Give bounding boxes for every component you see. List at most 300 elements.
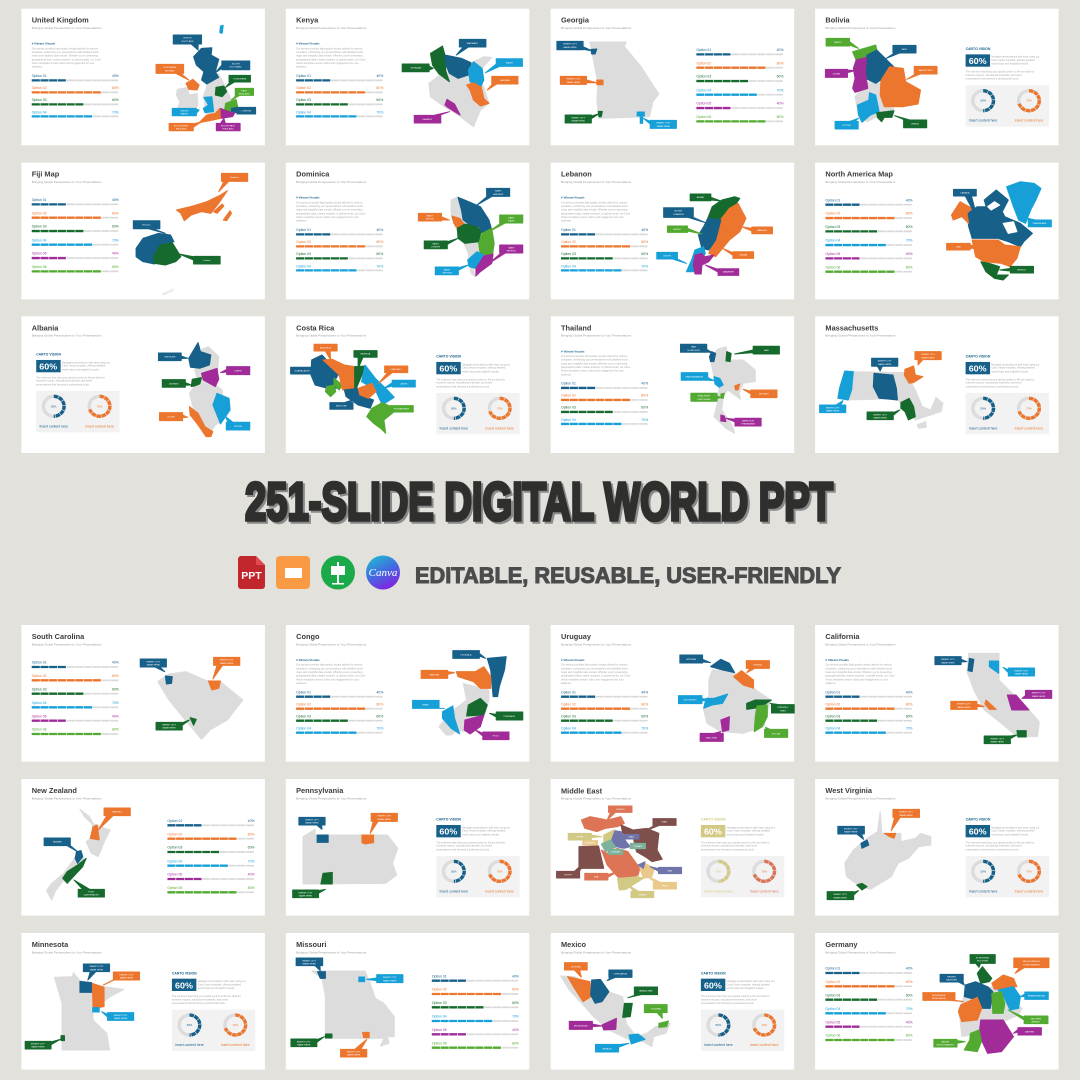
bar chart: Option 01 xyxy=(32,661,47,665)
panel: Carto Vision: Carto Vision template, offering detailed xyxy=(991,59,1035,62)
callout: south city: NAME HERE xyxy=(299,894,313,897)
text block: vibrant visuals: # Vibrant Visuals xyxy=(296,658,320,662)
bar chart: 40% xyxy=(512,974,519,978)
panel: Carto Vision xyxy=(701,971,784,1051)
callout: Beni: BENI xyxy=(902,49,907,51)
bar chart: Option 02 xyxy=(296,240,311,244)
bar chart: 80% xyxy=(376,702,383,706)
callout: southwest city: INSERT CITY xyxy=(31,1044,45,1046)
bar chart: Option 02 xyxy=(825,702,840,706)
bar chart: Option 04 xyxy=(296,110,311,114)
callout: west city: NAME HERE xyxy=(844,831,858,834)
callout: Pando: PANDO xyxy=(834,41,842,44)
bar chart: 40% xyxy=(906,690,913,694)
callout: central city xyxy=(102,1012,134,1020)
callout: south city: INSERT CITY xyxy=(873,414,888,416)
text block: vibrant visuals: audience. xyxy=(296,66,307,69)
heading: Bringing Global Perspectives to Your Presentations xyxy=(561,950,632,954)
callout: Waikato: WAIKATO xyxy=(112,811,122,814)
callout: Central: Central xyxy=(203,259,211,262)
bar chart: 80% xyxy=(112,265,119,269)
callout: Iraq: IRAQ xyxy=(629,836,634,839)
panel: Carto Vision: 60% xyxy=(439,827,457,837)
panel: Carto Vision: 70% xyxy=(761,1023,768,1027)
callout: Saint George: GEORGE xyxy=(442,272,452,274)
text block: vibrant visuals: maps and insightful data visuals. Whether you're presenting xyxy=(561,209,628,212)
icon: Canva xyxy=(366,556,400,590)
panel: Carto Vision: The schemes that bring your global content to life are ideal for xyxy=(172,995,241,998)
panel: Carto Vision: presentations that demand a professional touch. xyxy=(966,848,1019,851)
callout: northeast city: NAME HERE xyxy=(378,818,391,821)
slide: West Virginia xyxy=(815,779,1059,916)
callout: central coast city: INSERT CITY xyxy=(957,704,971,706)
bar chart xyxy=(296,228,383,270)
heading xyxy=(32,786,102,800)
bar chart: 40% xyxy=(248,873,255,877)
panel: Carto Vision: The schemes that bring your global content to life are ideal for xyxy=(966,378,1035,381)
callout: Durres: DURRES xyxy=(169,383,179,385)
bar chart: Option 01 xyxy=(561,382,576,386)
callout: south city: NAME HERE xyxy=(163,727,176,730)
panel: Carto Vision: The schemes that bring your global content to life are ideal for xyxy=(966,841,1035,844)
heading xyxy=(561,632,632,646)
callout: Sachsen-Anhalt: SACHSEN xyxy=(1030,1017,1042,1020)
bar chart xyxy=(167,819,255,892)
callout: Saint George xyxy=(435,265,468,275)
bar chart: 40% xyxy=(906,252,913,256)
callout: top city: INSERT CITY xyxy=(563,44,577,46)
bar chart: 80% xyxy=(112,674,119,678)
heading: Bringing Global Perspectives to Your Presentations xyxy=(561,642,632,646)
bar chart: 60% xyxy=(641,406,648,410)
panel: Carto Vision: presentations that demand a professional touch. xyxy=(36,383,90,386)
panel: Carto Vision: Insert content here xyxy=(969,119,998,123)
panel: Carto Vision: business reports, educational materials, and travel xyxy=(36,380,93,383)
callout: south city: INSERT CITY xyxy=(162,725,177,727)
heading xyxy=(561,16,632,30)
heading xyxy=(296,323,367,338)
callout: Saint Joseph: SAINT xyxy=(432,242,440,245)
text block: vibrant visuals: templates, enhancing your presentations with detailed world xyxy=(32,51,99,54)
callout: South: SOUTH xyxy=(663,255,671,257)
heading xyxy=(32,323,102,338)
panel: Carto Vision: CARTO VISION xyxy=(701,971,726,975)
callout: Mae Hong Son xyxy=(681,344,712,353)
bar chart: Option 04 xyxy=(32,701,47,705)
callout: northeast city xyxy=(370,813,397,833)
callout: Tasman: TASMAN xyxy=(53,841,62,844)
bar chart: 80% xyxy=(112,86,119,90)
heading: Mexico xyxy=(561,940,587,949)
callout: Turkey: TURKEY xyxy=(616,809,625,811)
bar chart: Option 03 xyxy=(825,225,840,229)
text block: vibrant visuals: maps and insightful data visuals. Whether you're presenting xyxy=(296,209,363,212)
bar chart: 40% xyxy=(777,102,784,106)
slide: Uruguay xyxy=(551,625,794,762)
slide: Pennsylvania xyxy=(286,779,529,916)
callout: Saint Andrew: SAINT xyxy=(495,190,502,193)
callout: Brandenburg: BRANDENBURG xyxy=(1028,995,1045,998)
map: California xyxy=(935,653,1052,744)
bar chart: Option 03 xyxy=(32,687,47,691)
callout: coastal city: INSERT CITY xyxy=(656,123,671,125)
callout: Likouala: LIKOUALA xyxy=(460,653,472,656)
heading: Bringing Global Perspectives to Your Presentations xyxy=(32,180,102,184)
map: Missouri xyxy=(291,958,403,1057)
bar chart: Option 02 xyxy=(296,702,311,706)
bar chart: Option 01 xyxy=(296,74,311,78)
callout: south city xyxy=(827,891,858,900)
callout: northwest city: NAME HERE xyxy=(147,664,160,667)
bar chart: 60% xyxy=(641,252,648,256)
callout: south city: INSERT CITY xyxy=(347,1052,361,1054)
bar chart: 40% xyxy=(641,690,648,694)
bar chart: Option 02 xyxy=(32,211,47,215)
heading: Bringing Global Perspectives to Your Presentations xyxy=(296,334,367,338)
heading: Bringing Global Perspectives to Your Presentations xyxy=(825,26,896,30)
callout: Mount Lebanon: LEBANON xyxy=(673,213,684,216)
callout: Niedersachsen: NIEDER xyxy=(947,977,956,979)
callout: north city: NAME HERE xyxy=(220,662,234,665)
panel: Carto Vision: world maps and insightful visuals. xyxy=(991,833,1029,836)
bar chart: Option 01 xyxy=(561,690,576,694)
callout: Beirut: BEIRUT xyxy=(673,229,682,231)
bar chart: 70% xyxy=(112,238,119,242)
text block: vibrant visuals: Our service provides high-quality visuals tailored for various xyxy=(561,355,628,358)
heading: Bringing Global Perspectives to Your Presentations xyxy=(825,334,896,338)
bar chart: 40% xyxy=(906,967,913,971)
panel: Carto Vision: presentations that demand a professional touch. xyxy=(701,848,755,851)
callout: northwest city xyxy=(296,958,323,971)
panel: Carto Vision xyxy=(966,47,1049,127)
panel: Carto Vision: 50% xyxy=(980,869,987,873)
text block: vibrant visuals: Our service provides high-quality visuals tailored for various xyxy=(32,47,99,50)
map: Kenya xyxy=(402,39,522,127)
callout: Rocha: ROCHA xyxy=(772,732,780,735)
bar chart: Option 06 xyxy=(32,265,47,269)
panel: Carto Vision: 50% xyxy=(51,404,57,408)
text block: vibrant visuals: audience. xyxy=(296,682,307,685)
callout: south city xyxy=(984,735,1017,744)
panel: Carto Vision: Navigate presentations with ease using our xyxy=(727,980,775,983)
panel: Carto Vision: 50% xyxy=(980,99,987,103)
text block: vibrant visuals: Our service provides high-quality visuals tailored for various xyxy=(296,664,363,667)
bar chart: 80% xyxy=(906,1034,913,1038)
bar chart: Option 06 xyxy=(167,886,182,890)
bar chart: Option 01 xyxy=(296,690,311,694)
callout: Saint Andrew: ANDREW xyxy=(493,193,504,196)
panel: Carto Vision: presentations that demand a professional touch. xyxy=(966,385,1019,388)
callout: Cartago: CARTAGO xyxy=(391,368,402,371)
callout: Akkar: AKKAR xyxy=(697,196,705,199)
heading: Lebanon xyxy=(561,170,592,179)
callout: Oaxaca: OAXACA xyxy=(602,1047,612,1050)
callout: Marsabit: MARSABIT xyxy=(467,42,479,45)
panel: Carto Vision: world maps and insightful visuals. xyxy=(991,370,1029,373)
panel: Carto Vision: business reports, educational materials, and travel xyxy=(436,382,493,385)
bar chart: 40% xyxy=(376,690,383,694)
text block: vibrant visuals: templates, enhancing your presentations with detailed world xyxy=(296,205,363,208)
panel: Carto Vision: Insert content here xyxy=(485,426,514,430)
callout: north city xyxy=(83,964,110,980)
heading: Bringing Global Perspectives to Your Presentations xyxy=(296,180,367,184)
text block: vibrant visuals: Our service provides high-quality visuals tailored for various xyxy=(561,201,628,204)
callout: Saint George: SAINT xyxy=(444,268,451,271)
bar chart: Option 01 xyxy=(32,198,47,202)
slide: Germany xyxy=(815,933,1059,1070)
text block: vibrant visuals: Vision templates ensure clarity and engagement for your xyxy=(32,62,95,65)
bar chart xyxy=(32,198,119,271)
bar chart: Option 04 xyxy=(32,110,47,114)
callout: Yemen: YEMEN xyxy=(638,894,647,896)
panel: Carto Vision: world maps and insightful visuals. xyxy=(62,368,100,371)
callout: Kanchanaburi: KANCHANABURI xyxy=(685,375,704,378)
bar chart: 60% xyxy=(112,225,119,229)
bar chart: 60% xyxy=(512,1001,519,1005)
heading: North America Map xyxy=(825,170,893,179)
panel: Carto Vision: presentations that demand a professional touch. xyxy=(966,78,1019,81)
heading: Bolivia xyxy=(825,16,851,25)
heading: Middle East xyxy=(561,786,603,795)
panel: Carto Vision xyxy=(701,818,784,897)
callout: Michoacan: MICHOACAN xyxy=(574,1024,588,1027)
callout: Mecklenburg xyxy=(1014,958,1049,973)
bar chart xyxy=(561,690,648,733)
panel: Carto Vision: The schemes that bring your global content to life are ideal for xyxy=(436,841,505,844)
panel: Carto Vision: business reports, educational materials, and travel xyxy=(966,845,1022,848)
callout: Saint Patrick: PATRICK xyxy=(507,250,517,253)
heading xyxy=(561,323,632,338)
panel: Carto Vision: 70% xyxy=(1026,406,1032,410)
callout: Iran: IRAN xyxy=(662,821,667,824)
bar chart xyxy=(432,974,519,1048)
bar chart: 40% xyxy=(641,228,648,232)
callout: Vlore: VLORE xyxy=(167,417,175,419)
bar chart: 60% xyxy=(112,687,119,691)
callout: Saint Joseph: JOSEPH xyxy=(431,246,440,248)
heading xyxy=(561,940,632,954)
bar chart: Option 05 xyxy=(696,102,711,106)
callout: South West England: ENGLAND xyxy=(176,127,187,130)
callout: Saint Patrick xyxy=(489,245,523,263)
callout: north city xyxy=(213,657,240,679)
bar chart: Option 05 xyxy=(32,252,47,256)
heading: Bringing Global Perspectives to Your Presentations xyxy=(825,796,896,800)
bar chart: Option 04 xyxy=(561,264,576,268)
slide: Mexico xyxy=(551,933,794,1070)
heading: Bringing Global Perspectives to Your Presentations xyxy=(561,797,632,801)
bar chart: Option 01 xyxy=(825,198,840,202)
panel: Carto Vision: presentations that demand a professional touch. xyxy=(701,1002,755,1005)
heading: Congo xyxy=(296,632,320,641)
map: New Zealand xyxy=(44,808,130,900)
panel: Carto Vision: Insert content here xyxy=(85,424,114,428)
panel: Carto Vision: 70% xyxy=(1026,869,1032,873)
text block: vibrant visuals xyxy=(296,42,366,69)
bar chart: Option 04 xyxy=(825,239,840,243)
panel: Carto Vision xyxy=(966,355,1049,434)
text block: vibrant visuals: templates, enhancing your presentations with detailed world xyxy=(561,205,628,208)
callout: Rio Negro: RIO NEGRO xyxy=(684,700,697,702)
heading: Kenya xyxy=(296,16,319,25)
callout: coastal city: NAME HERE xyxy=(657,125,670,128)
callout: Schleswig-Holstein xyxy=(970,955,995,967)
icon: Canva: Canva xyxy=(369,567,398,579)
heading xyxy=(32,16,102,30)
callout: Lebanon: LEBANON xyxy=(585,842,596,845)
panel: Carto Vision: world maps and insightful visuals. xyxy=(198,987,235,990)
text block: vibrant visuals: maps and insightful data visuals. Whether you're presenting xyxy=(296,671,363,674)
heading xyxy=(825,786,896,800)
panel: Carto Vision: business reports, educational materials, and travel xyxy=(966,382,1022,385)
bar chart: 70% xyxy=(376,727,383,731)
text block: vibrant visuals: geographical data, market analysis, or global trends, our Carto xyxy=(296,675,366,678)
panel: Carto Vision: 60% xyxy=(39,362,57,372)
callout: middle city xyxy=(560,76,597,84)
slide: Kenya xyxy=(286,9,529,145)
bar chart: 70% xyxy=(906,239,913,243)
slide: Thailand xyxy=(551,316,794,453)
callout: northeast city xyxy=(1003,667,1034,676)
callout: south city: INSERT CITY xyxy=(299,892,313,894)
panel: Carto Vision: 50% xyxy=(187,1023,193,1027)
callout: Nordrhein-Westfalen: NORDRHEIN xyxy=(932,995,946,997)
callout: Tarija: TARIJA xyxy=(911,123,919,126)
callout: west city: INSERT CITY xyxy=(826,407,840,409)
text block: vibrant visuals: # Vibrant Visuals xyxy=(561,349,585,353)
callout: central city: NAME HERE xyxy=(878,363,892,366)
heading: Bringing Global Perspectives to Your Presentations xyxy=(296,642,367,646)
bar chart: 70% xyxy=(641,418,648,422)
callout: Wales: WALES xyxy=(180,112,189,115)
text block: vibrant visuals: Vision templates ensure clarity and engagement for your xyxy=(296,216,359,219)
callout: southwest city xyxy=(291,1037,324,1047)
callout: north coast city: NAME HERE xyxy=(941,661,955,664)
bar chart: Option 02 xyxy=(32,86,47,90)
callout: UAE: UAE xyxy=(668,869,673,872)
callout: northeast city: INSERT CITY xyxy=(1015,670,1029,672)
callout: Wales: SOUTH xyxy=(180,110,189,112)
bar chart: 80% xyxy=(112,211,119,215)
bar chart: Option 04 xyxy=(296,264,311,268)
panel: Carto Vision: 50% xyxy=(451,406,457,410)
panel: Carto Vision: The schemes that bring your global content to life are ideal for xyxy=(701,841,770,844)
icon: PPT file xyxy=(238,556,265,589)
bar chart: Option 04 xyxy=(32,238,47,242)
heading xyxy=(296,632,367,646)
panel: Carto Vision xyxy=(172,971,255,1051)
panel: Carto Vision: 50% xyxy=(980,406,987,410)
panel: Carto Vision: CARTO VISION xyxy=(701,818,726,822)
callout: south city xyxy=(293,889,325,898)
panel: Carto Vision: 60% xyxy=(704,827,722,837)
slide: Massachusetts xyxy=(815,316,1059,453)
bar chart: 40% xyxy=(777,48,784,52)
panel: Carto Vision: Insert content here xyxy=(440,426,468,430)
bar chart: Option 01 xyxy=(296,228,311,232)
bar chart: 80% xyxy=(777,61,784,65)
callout: Kajiado: KAJIADO xyxy=(423,118,432,121)
heading: Bringing Global Perspectives to Your Presentations xyxy=(561,180,632,184)
panel: Carto Vision: Navigate presentations with ease using our xyxy=(462,826,510,829)
panel: Carto Vision: 50% xyxy=(716,1023,722,1027)
bar chart: 70% xyxy=(112,110,119,114)
callout: northwest city: NAME HERE xyxy=(305,822,319,825)
callout: Mount Lebanon: MOUNT xyxy=(674,211,683,213)
bar chart: 70% xyxy=(777,88,784,92)
callout: northeast city: NAME HERE xyxy=(921,356,935,359)
callout: north city: INSERT CITY xyxy=(90,966,104,968)
text block: vibrant visuals: audience. xyxy=(561,682,572,685)
heading xyxy=(296,940,367,954)
callout: central city xyxy=(872,358,898,371)
text block: vibrant visuals: maps and insightful data visuals. Whether you're presenting xyxy=(825,671,892,674)
callout: Sangha: SANGHA xyxy=(430,673,439,676)
bar chart: Option 02 xyxy=(696,61,711,65)
bar chart: Option 02 xyxy=(825,212,840,216)
callout: south city: INSERT CITY xyxy=(990,738,1005,740)
bar chart: Option 06 xyxy=(432,1041,447,1045)
bar chart: Option 02 xyxy=(32,674,47,678)
callout: central coast city xyxy=(951,701,984,709)
callout: East England xyxy=(231,88,254,100)
slide: Lebanon xyxy=(551,163,794,299)
callout: Yorkshire: YORKSHIRE xyxy=(233,78,247,80)
bar chart: Option 02 xyxy=(825,980,840,984)
callout: northwest city xyxy=(299,817,325,829)
slide: Georgia xyxy=(551,9,794,145)
bar chart: 40% xyxy=(112,661,119,665)
panel: Carto Vision: 50% xyxy=(716,869,722,873)
panel: Carto Vision: Insert content here xyxy=(704,889,733,893)
callout: inland city: INSERT CITY xyxy=(1032,693,1046,695)
callout: Heredia: HEREDIA xyxy=(360,353,371,356)
headline xyxy=(245,472,835,534)
icon: Keynote xyxy=(321,556,355,590)
panel: Carto Vision: world maps and insightful visuals. xyxy=(462,833,500,836)
callout: west city xyxy=(838,826,864,839)
bar chart: Option 05 xyxy=(167,873,182,877)
callout: Egypt: EGYPT xyxy=(564,874,573,876)
callout: central city: INSERT CITY xyxy=(878,361,892,363)
panel: Carto Vision: Insert content here xyxy=(175,1043,204,1047)
callout: Mexico: MEXICO xyxy=(1017,269,1026,271)
panel: Carto Vision: business reports, educational materials, and travel xyxy=(172,998,228,1001)
slide: Costa Rica xyxy=(286,316,529,453)
bar chart: Option 04 xyxy=(825,727,840,731)
heading: Bringing Global Perspectives to Your Presentations xyxy=(32,334,102,338)
panel: Carto Vision: 70% xyxy=(497,869,503,873)
callout: San Jose: SAN JOSE xyxy=(706,736,718,739)
bar chart: Option 04 xyxy=(296,727,311,731)
callout: Nan: NAN xyxy=(764,349,769,352)
callout: Saint Joseph xyxy=(424,238,458,249)
text block: vibrant visuals: Our service provides high-quality visuals tailored for various xyxy=(561,664,628,667)
map: Fiji xyxy=(133,173,248,295)
map: Minnesota xyxy=(25,964,140,1050)
heading: Massachusetts xyxy=(825,323,878,332)
panel: Carto Vision: Carto Vision template, offering detailed xyxy=(727,983,770,986)
heading xyxy=(32,170,102,184)
bar chart: 70% xyxy=(641,264,648,268)
bar chart: Option 02 xyxy=(561,394,576,398)
bar chart: Option 03 xyxy=(296,252,311,256)
text block: vibrant visuals xyxy=(825,658,895,685)
callout: south city xyxy=(341,1039,367,1057)
text block: vibrant visuals: maps and insightful data visuals. Whether you're presenting xyxy=(32,55,99,58)
heading: Bringing Global Perspectives to Your Presentations xyxy=(296,950,367,954)
bar chart: 40% xyxy=(906,198,913,202)
